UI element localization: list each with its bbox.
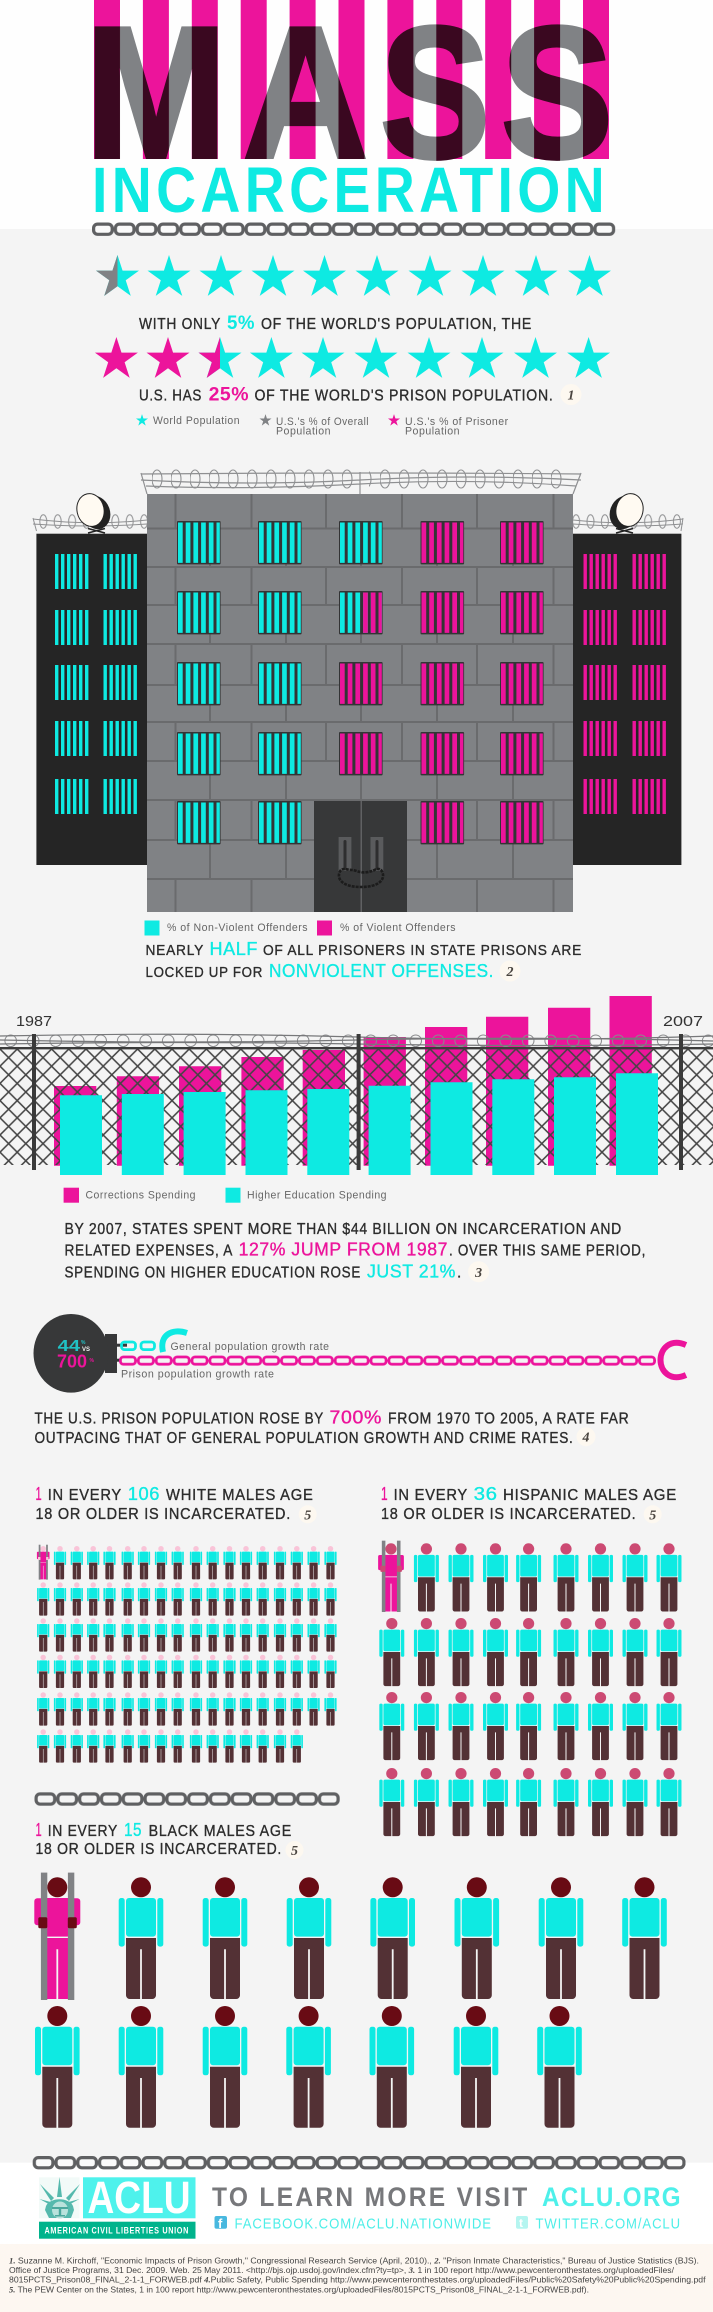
- stat text: 700%: [34, 1406, 630, 1447]
- sources: 8015PCTS_Prison08_FINAL_2-1-1_FORWEB.pdf 4.Public Safety, Public Spending http://www.pewcenteronthestates.org/uploadedFiles/Public%20Safety%20Public%20Spending.pdf: [9, 2276, 706, 2285]
- legend: stars: Population: [276, 426, 331, 438]
- stat text: half nonviolent: LOCKED UP FOR: [146, 964, 263, 981]
- sources: 1. Suzanne M. Kirchoff, "Economic Impacts of Prison Growth," Congressional Research Service (April, 2010)., 2. "Prison Inmate Characteristics," Bureau of Justice Statistics (BJS).: [9, 2256, 699, 2265]
- sources: 5. The PEW Center on the States, 1 in 100 report http://www.pewcenteronthestates.org/uploadedFiles/8015PCTS_Prison08_FINAL_2-1-1_FORWEB.pdf).: [9, 2286, 589, 2295]
- prison population chain: [119, 1343, 686, 1377]
- stat text: spending: RELATED EXPENSES, A: [64, 1242, 233, 1259]
- stat text: 25% of prisoners: U.S. HAS: [139, 388, 202, 404]
- twitter link: TWITTER.COM/ACLU: [536, 2216, 681, 2232]
- heading: white males: [36, 1483, 317, 1523]
- sources: [9, 2256, 706, 2295]
- stars: world population: [96, 255, 611, 296]
- legend: stars: U.S.'s % of Overall: [276, 416, 369, 428]
- heading: white males: 1: [36, 1483, 42, 1504]
- heading: white males: 106: [128, 1483, 160, 1504]
- twitter link: t: [519, 2216, 523, 2230]
- ball numbers: 44: [58, 1338, 80, 1355]
- title word INCARCERATION: INCARCERATION: [92, 154, 609, 226]
- pictogram: black males: [34, 1873, 667, 2128]
- ball and chain graphic: [34, 1314, 686, 1393]
- stat text: 5% of population: WITH ONLY: [139, 316, 221, 333]
- stat text: spending: [64, 1221, 646, 1282]
- stat text: 5% of population: 5%: [227, 313, 255, 334]
- stat text: spending: JUST 21%: [367, 1260, 456, 1281]
- heading: white males: 18 OR OLDER IS INCARCERATED.: [36, 1506, 291, 1523]
- year label 1987: 1987: [16, 1013, 52, 1030]
- razor wire right wing: [573, 512, 683, 531]
- stat text: half nonviolent: OF ALL PRISONERS IN STATE PRISONS ARE: [263, 942, 582, 959]
- right spotlight: [605, 491, 646, 533]
- heading: black males: BLACK MALES AGE: [149, 1823, 292, 1840]
- spending bar chart: [0, 996, 713, 1175]
- heading: hispanic males: [381, 1483, 677, 1523]
- left wing building: [36, 534, 147, 865]
- ball numbers: VS: [82, 1347, 90, 1353]
- stat text: spending: 127% JUMP FROM 1987: [239, 1238, 448, 1259]
- heading: hispanic males: 18 OR OLDER IS INCARCERATED.: [381, 1506, 636, 1523]
- heading: black males: 5: [291, 1844, 298, 1859]
- main building brick wall: [147, 494, 573, 912]
- prison illustration: [33, 468, 683, 912]
- stat text: half nonviolent: 2: [506, 965, 514, 980]
- ACLU logo: [39, 2172, 196, 2239]
- stat text: 700%: FROM 1970 TO 2005, A RATE FAR: [388, 1410, 630, 1427]
- sources: Office of Justice Programs, 31 Dec. 2009. Web. 25 May 2011. <http://bjs.ojp.usdoj.gov/index.cfm?ty=tp>, 3. 1 in 100 report http://www.pewcenteronthestates.org/uploadedFiles/: [9, 2266, 675, 2275]
- right wing building: [573, 534, 681, 865]
- heading: hispanic males: 1: [381, 1483, 388, 1504]
- stat text: spending: . OVER THIS SAME PERIOD,: [449, 1242, 646, 1259]
- heading: hispanic males: 36: [474, 1483, 498, 1504]
- stat text: 700%: THE U.S. PRISON POPULATION ROSE BY: [34, 1410, 324, 1427]
- year label 2007: 2007: [663, 1013, 703, 1030]
- razor wire top of main building: [141, 468, 581, 494]
- statue of liberty icon: [39, 2177, 80, 2218]
- facebook link: f: [218, 2216, 223, 2231]
- stars: prison population: [95, 337, 610, 378]
- ball numbers: %: [81, 1340, 86, 1346]
- chain divider middle: [34, 1792, 340, 1806]
- stat text: 700%: 700%: [330, 1406, 382, 1427]
- stat text: 700%: OUTPACING THAT OF GENERAL POPULATION GROWTH AND CRIME RATES.: [34, 1430, 574, 1447]
- ACLU wordmark: ACLU: [88, 2172, 190, 2223]
- chain divider top: [92, 222, 615, 236]
- higher education spending bars: [60, 1073, 658, 1175]
- heading: black males: 15: [124, 1819, 142, 1840]
- stat text: spending: .: [457, 1264, 462, 1281]
- legend: offenders: [144, 920, 456, 936]
- corrections spending bars: [54, 996, 652, 1166]
- American Civil Liberties Union bar: [39, 2222, 196, 2239]
- heading: white males: 5: [304, 1508, 311, 1523]
- legend: spending: Corrections Spending: [86, 1190, 196, 1202]
- call to action: TO LEARN MORE VISIT: [212, 2182, 530, 2212]
- legend: stars: World Population: [153, 415, 240, 427]
- left spotlight: [74, 491, 115, 533]
- footer white band: [0, 2163, 713, 2244]
- facebook link: FACEBOOK.COM/ACLU.NATIONWIDE: [234, 2216, 492, 2232]
- top white band: [0, 0, 713, 229]
- general population chain: [122, 1331, 187, 1352]
- heading: black males: IN EVERY: [48, 1823, 118, 1840]
- legend: stars: Population: [405, 426, 460, 438]
- legend: spending: [64, 1188, 387, 1203]
- stat text: spending: SPENDING ON HIGHER EDUCATION ROSE: [64, 1264, 361, 1281]
- heading: black males: [36, 1819, 304, 1859]
- legend: spending: Higher Education Spending: [247, 1190, 387, 1202]
- general population label: General population growth rate: [170, 1341, 330, 1353]
- legend: stars: [136, 414, 509, 438]
- heading: hispanic males: 5: [649, 1508, 656, 1523]
- ball numbers: %: [90, 1358, 94, 1364]
- heading: white males: IN EVERY: [48, 1487, 122, 1504]
- stat text: 25% of prisoners: [139, 384, 582, 406]
- sources band: [0, 2244, 713, 2312]
- razor wire left wing: [33, 512, 147, 531]
- pictogram: white males: [37, 1545, 337, 1763]
- ball numbers: 700: [57, 1352, 87, 1372]
- stat text: 5% of population: [139, 313, 532, 334]
- stat text: spending: 3: [474, 1266, 482, 1281]
- legend: offenders: % of Non-Violent Offenders: [167, 922, 308, 934]
- prison door with chain: [314, 801, 407, 912]
- stat text: 700%: 4: [582, 1431, 590, 1446]
- stat text: 5% of population: OF THE WORLD'S POPULATION, THE: [261, 316, 532, 333]
- heading: hispanic males: IN EVERY: [394, 1487, 468, 1504]
- stat text: spending: BY 2007, STATES SPENT MORE THAN $44 BILLION ON INCARCERATION AND: [64, 1221, 622, 1238]
- American Civil Liberties Union bar: AMERICAN CIVIL LIBERTIES UNION: [44, 2225, 189, 2235]
- stat text: half nonviolent: NEARLY: [146, 942, 204, 959]
- ACLU wordmark box: [83, 2177, 196, 2218]
- call to action: ACLU.ORG: [542, 2182, 682, 2212]
- legend: stars: U.S.'s % of Prisoner: [405, 416, 509, 428]
- main building windows: [177, 521, 544, 844]
- heading: white males: WHITE MALES AGE: [166, 1487, 314, 1504]
- title: [85, 0, 613, 226]
- chain divider bottom: [33, 2156, 685, 2170]
- stat text: half nonviolent: NONVIOLENT OFFENSES.: [269, 960, 494, 981]
- legend: offenders: % of Violent Offenders: [340, 922, 456, 934]
- stat text: 25% of prisoners: 1: [568, 388, 574, 404]
- heading: black males: 18 OR OLDER IS INCARCERATED.: [36, 1841, 282, 1858]
- stat text: 25% of prisoners: 25%: [209, 384, 249, 406]
- pictogram: hispanic males: [378, 1541, 681, 1836]
- title stripes: [94, 0, 609, 159]
- stat text: half nonviolent: [146, 938, 582, 982]
- prison population label: Prison population growth rate: [121, 1369, 274, 1381]
- chain link fence: [0, 1034, 713, 1170]
- stat text: half nonviolent: HALF: [210, 938, 258, 959]
- stat text: 25% of prisoners: OF THE WORLD'S PRISON POPULATION.: [254, 388, 554, 404]
- iron ball: [34, 1314, 127, 1393]
- ball numbers: [57, 1338, 94, 1372]
- heading: hispanic males: HISPANIC MALES AGE: [503, 1487, 677, 1504]
- heading: black males: 1: [36, 1819, 42, 1840]
